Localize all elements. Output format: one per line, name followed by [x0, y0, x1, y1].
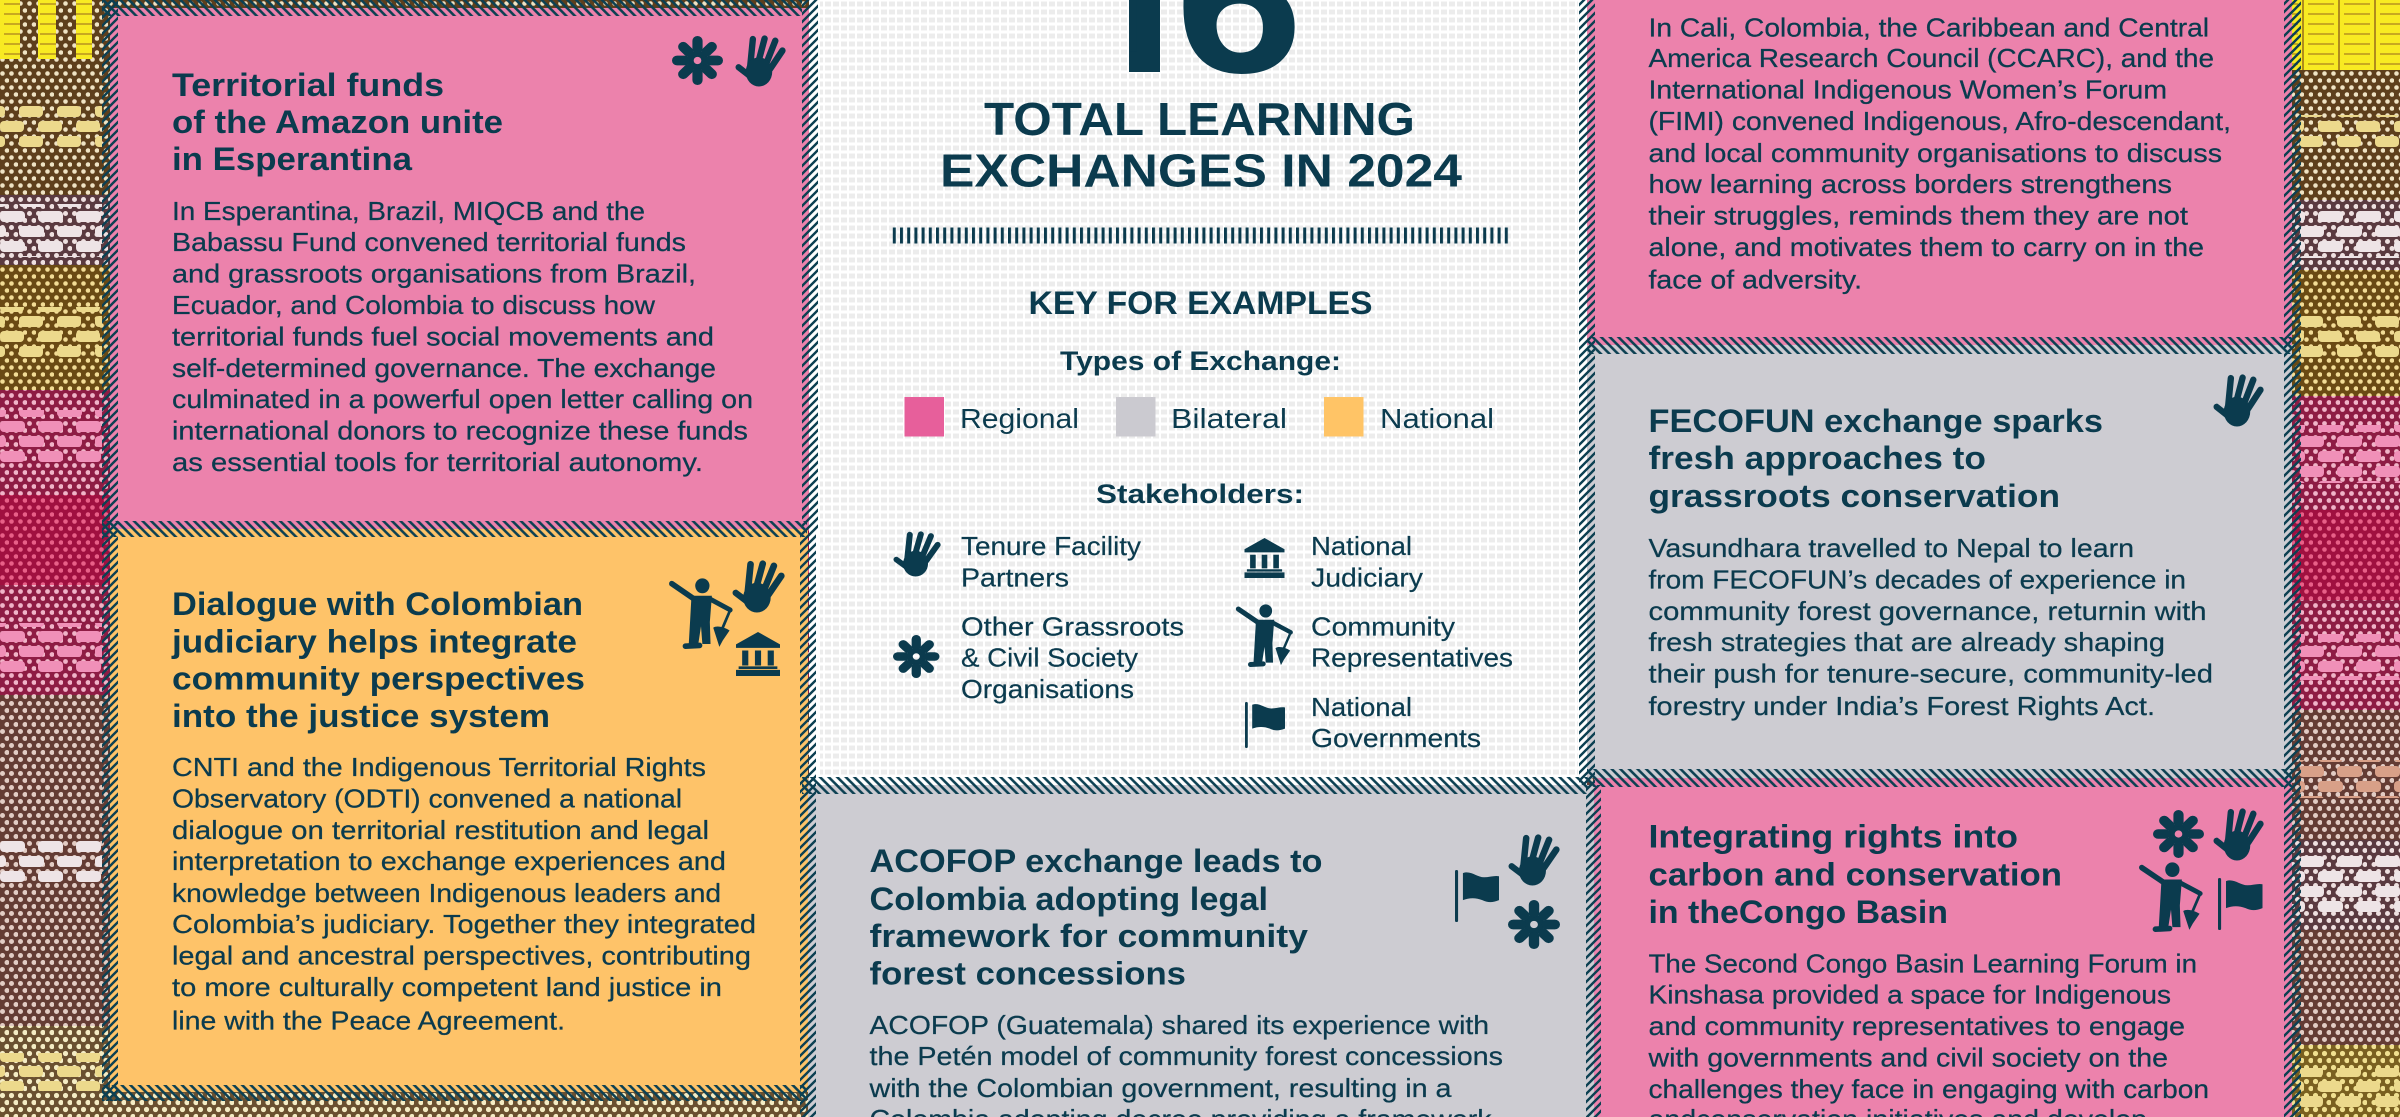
body text: CNTI: legal and ancestral perspectives, contributing: [172, 940, 751, 970]
legend: stakeholders: Representatives: [1311, 643, 1513, 673]
body text: Esperantina: Ecuador, and Colombia to discuss how: [172, 290, 655, 320]
body text: Congo Basin: [1647, 948, 2209, 1117]
heading: Dialogue with Colombian judiciary: Dialogue with Colombian: [172, 586, 583, 622]
legend: types of exchange: Bilateral: [1171, 403, 1287, 434]
icon: hand: [736, 564, 781, 612]
body text: Vasundhara: forestry under India’s Forest Rights Act.: [1648, 691, 2155, 721]
body text: ACOFOP: ACOFOP (Guatemala) shared its experience with: [870, 1010, 1489, 1040]
heading: Territorial funds: in Esperantina: [172, 141, 412, 177]
panel: ACOFOP exchange: [808, 785, 1594, 1117]
heading: key for examples: KEY FOR EXAMPLES: [1028, 285, 1372, 321]
legend: stakeholders: Partners: [961, 563, 1069, 593]
icon: flower: [2158, 815, 2199, 853]
body text: Cali: and local community organisations to discuss: [1648, 138, 2222, 168]
body text: CNTI: interpretation to exchange experiences and: [172, 846, 726, 876]
icon: person: [672, 578, 730, 647]
legend: stakeholders: Judiciary: [1311, 563, 1423, 593]
body text: Esperantina: international donors to recognize these funds: [172, 416, 748, 446]
heading: ACOFOP exchange: Colombia adopting legal: [870, 881, 1268, 917]
heading: Integrating rights: Integrating rights into: [1648, 818, 2018, 854]
heading: Dialogue with Colombian judiciary: [171, 586, 585, 734]
icon: flag: [1455, 870, 1499, 922]
legend: stakeholders: & Civil Society: [961, 643, 1138, 673]
body text: Esperantina: self-determined governance. The exchange: [172, 353, 716, 383]
legend: stakeholders: National: [1311, 531, 1412, 561]
body text: Vasundhara: [1648, 533, 2213, 721]
body text: Esperantina: territorial funds fuel social movements and: [172, 322, 714, 352]
heading: ACOFOP exchange: ACOFOP exchange leads to: [870, 843, 1322, 879]
body text: CNTI: Observatory (ODTI) convened a national: [172, 784, 682, 814]
body text: Esperantina: culminated in a powerful open letter calling on: [172, 384, 753, 414]
panel: Cali regional exchange: [1587, 0, 2292, 345]
body text: Vasundhara: from FECOFUN’s decades of experience in: [1648, 564, 2186, 594]
big number 16: [1129, 0, 1295, 74]
body text: Esperantina: In Esperantina, Brazil, MIQCB and the: [172, 196, 645, 226]
icon: bank: [736, 632, 780, 676]
body text: ACOFOP: with the Colombian government, resulting in a: [868, 1073, 1452, 1103]
body text: Cali: [1648, 12, 2231, 295]
body text: Esperantina: and grassroots organisations from Brazil,: [172, 258, 696, 288]
icon: hand: [2217, 812, 2260, 860]
icon: flag: [2218, 878, 2262, 930]
heading: Integrating rights: [1648, 818, 2062, 930]
heading: FECOFUN exchange: FECOFUN exchange sparks: [1648, 403, 2103, 439]
heading: FECOFUN exchange: grassroots conservation: [1648, 478, 2060, 514]
body text: Esperantina: [172, 196, 753, 477]
body text: Cali: their struggles, reminds them they are not: [1648, 201, 2189, 231]
body text: CNTI: dialogue on territorial restitution and legal: [172, 815, 709, 845]
panel: Dialogue with Colombian judiciary: [110, 529, 808, 1092]
body text: Cali: (FIMI) convened Indigenous, Afro-descendant,: [1648, 106, 2231, 136]
title: EXCHANGES IN 2024: [940, 144, 1462, 196]
body text: CNTI: to more culturally competent land justice in: [172, 972, 722, 1002]
panel: centre key: [809, 0, 1587, 785]
body text: Vasundhara: fresh strategies that are already shaping: [1648, 627, 2165, 657]
heading: ACOFOP exchange: [870, 843, 1322, 992]
body text: Vasundhara: Vasundhara travelled to Nepal to learn: [1648, 533, 2134, 563]
icon: hand: [2217, 378, 2260, 426]
body text: CNTI: [172, 752, 756, 1036]
body text: Vasundhara: community forest governance, returnin with: [1648, 596, 2206, 626]
legend: types of exchange: [904, 397, 1494, 436]
icon: flower: [677, 41, 718, 80]
legend: stakeholders: National: [1311, 692, 1412, 722]
icon: flower: [1513, 905, 1555, 944]
body text: Cali: In Cali, Colombia, the Caribbean and Central: [1648, 12, 2209, 42]
heading: types of exchange: Types of Exchange:: [1060, 346, 1341, 376]
panel: FECOFUN exchange: [1587, 345, 2292, 778]
body text: Cali: alone, and motivates them to carry on in the: [1648, 232, 2204, 262]
legend: stakeholders: Organisations: [961, 674, 1134, 704]
heading: Dialogue with Colombian judiciary: into the justice system: [172, 698, 550, 734]
body text: CNTI: knowledge between Indigenous leaders and: [172, 878, 721, 908]
body text: Cali: International Indigenous Women’s Forum: [1648, 75, 2167, 105]
title: [940, 93, 1462, 196]
legend: stakeholders: [896, 531, 1513, 753]
heading: stakeholders: Stakeholders:: [1096, 479, 1304, 509]
heading: FECOFUN exchange: [1648, 403, 2103, 514]
body text: Vasundhara: their push for tenure-secure, community-led: [1648, 659, 2213, 689]
body text: ACOFOP: [868, 1010, 1503, 1117]
heading: ACOFOP exchange: forest concessions: [870, 956, 1186, 992]
heading: Territorial funds: of the Amazon unite: [172, 104, 503, 140]
body text: CNTI: CNTI and the Indigenous Territorial Rights: [172, 752, 706, 782]
title: TOTAL LEARNING: [984, 93, 1415, 145]
icon: person: [2142, 862, 2200, 930]
body text: Congo Basin: The Second Congo Basin Learning Forum in: [1648, 948, 2197, 978]
body text: Congo Basin: challenges they face in engaging with carbon: [1648, 1074, 2209, 1104]
legend: types of exchange: National: [1380, 403, 1494, 434]
body text: Cali: face of adversity.: [1648, 265, 1862, 295]
legend: stakeholders: Governments: [1311, 723, 1481, 753]
heading: Integrating rights: in theCongo Basin: [1648, 894, 1948, 930]
heading: ACOFOP exchange: framework for community: [870, 918, 1308, 954]
body text: Congo Basin: Kinshasa provided a space for Indigenous: [1648, 980, 2171, 1010]
heading: Dialogue with Colombian judiciary: community perspectives: [172, 660, 585, 696]
body text: Esperantina: as essential tools for territorial autonomy.: [172, 447, 703, 477]
heading: Territorial funds: Territorial funds: [172, 67, 444, 103]
body text: Esperantina: Babassu Fund convened territorial funds: [172, 227, 686, 257]
body text: Cali: America Research Council (CCARC), and the: [1648, 43, 2214, 73]
icon: hand: [1512, 838, 1556, 885]
icon: hand: [739, 39, 782, 86]
legend: stakeholders: Other Grassroots: [961, 611, 1184, 641]
body text: Congo Basin: and community representatives to engage: [1648, 1011, 2185, 1041]
body text: Cali: how learning across borders strengthens: [1648, 169, 2172, 199]
body text: ACOFOP: the Petén model of community forest concessions: [870, 1041, 1503, 1071]
legend: stakeholders: Tenure Facility: [961, 531, 1141, 561]
heading: Integrating rights: carbon and conservation: [1648, 857, 2062, 893]
body text: Congo Basin: with governments and civil society on the: [1647, 1042, 2168, 1072]
panel: Territorial funds of the Amazon: [110, 8, 810, 529]
heading: FECOFUN exchange: fresh approaches to: [1648, 440, 1986, 476]
panel: Integrating rights Congo Basin: [1594, 778, 2292, 1117]
legend: types of exchange: Regional: [960, 403, 1079, 434]
heading: Dialogue with Colombian judiciary: judiciary helps integrate: [171, 624, 577, 660]
body text: CNTI: line with the Peace Agreement.: [172, 1006, 565, 1036]
heading: Territorial funds: [172, 67, 503, 177]
body text: CNTI: Colombia’s judiciary. Together they integrated: [172, 909, 756, 939]
legend: stakeholders: Community: [1311, 611, 1455, 641]
